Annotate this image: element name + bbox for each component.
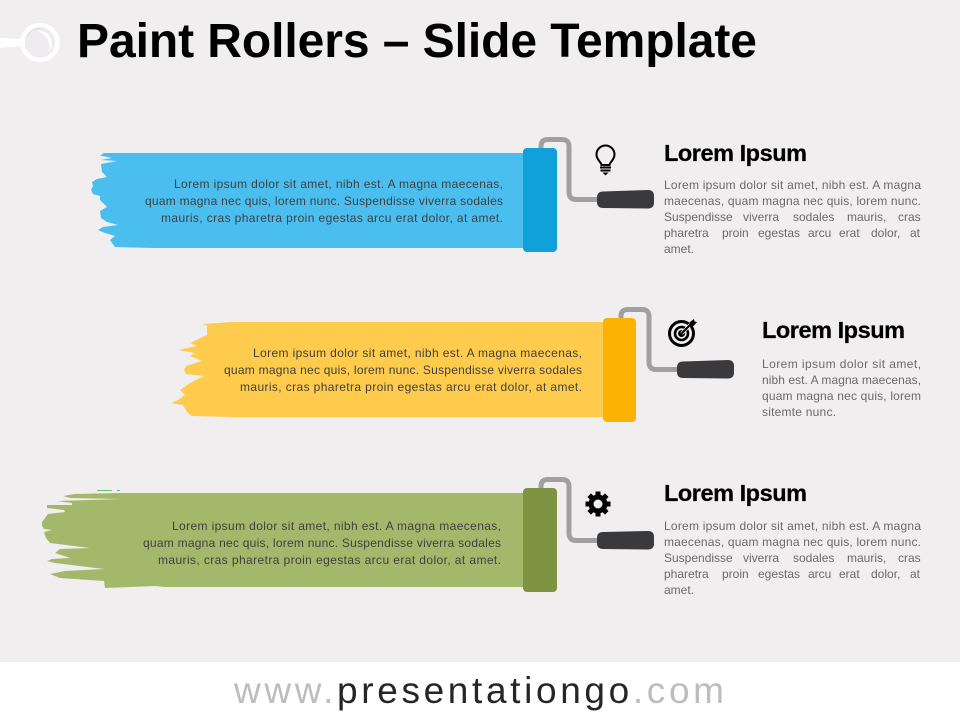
yellow stroke text: quam magna nec quis, lorem nunc. Suspendisse viverra sodales [224, 363, 582, 377]
green paint flecks [97, 490, 120, 492]
icon: target [670, 319, 697, 346]
body text: third item: viverra [743, 551, 779, 565]
yellow paint stroke [171, 322, 610, 417]
body text: third item: maecenas, quam magna nec quis, lorem nunc. [664, 535, 921, 549]
body text: third item: Lorem ipsum dolor sit amet, nibh est. A magna [664, 519, 921, 533]
panel: green paint roller [42, 480, 921, 597]
body text: third item: amet. [664, 583, 694, 597]
body text: first item: amet. [664, 242, 694, 256]
blue stroke text: quam magna nec quis, lorem nunc. Suspendisse viverra sodales [145, 194, 503, 208]
panel: yellow paint roller [171, 310, 921, 422]
yellow roller handle [621, 310, 734, 378]
footer website address: www.presentationgo.com [233, 670, 724, 711]
green stroke text: quam magna nec quis, lorem nunc. Suspendisse viverra sodales [143, 536, 501, 550]
heading: third item: Lorem Ipsum [664, 480, 807, 506]
body text: first item: egestas [758, 226, 800, 240]
body text: first item: mauris, [847, 210, 886, 224]
yellow stroke text: Lorem ipsum dolor sit amet, nibh est. A magna maecenas, [253, 346, 582, 360]
heading: first item: Lorem Ipsum [664, 140, 807, 166]
icon: title paint roller ring [0, 25, 58, 60]
body text: third item: Suspendisse [664, 551, 733, 565]
icon: light bulb [596, 146, 614, 176]
body text: third item: mauris, [847, 551, 886, 565]
body text: first item: dolor, [871, 226, 900, 240]
panel: blue paint roller [91, 140, 921, 256]
title: Paint Rollers – Slide Template [77, 15, 757, 68]
body text: third item: egestas [758, 567, 800, 581]
blue stroke text [145, 177, 503, 225]
green stroke text: Lorem ipsum dolor sit amet, nibh est. A magna maecenas, [172, 519, 501, 533]
green roller handle [541, 480, 654, 550]
icon: gear [586, 492, 610, 516]
body text: third item: sodales [793, 551, 834, 565]
green paint stroke [42, 493, 530, 588]
body text: third item: erat [839, 567, 860, 581]
body text: first item: sodales [793, 210, 834, 224]
body text: third item: dolor, [871, 567, 900, 581]
body text: first item: arcu [808, 226, 831, 240]
body text: third item [664, 519, 921, 597]
body text: third item: arcu [808, 567, 831, 581]
body text: third item: at [910, 567, 921, 581]
yellow stroke text: mauris, cras pharetra proin egestas arcu erat dolor, at amet. [240, 380, 582, 394]
body text: second item: nibh est. A magna maecenas, [762, 373, 921, 387]
body text: first item: maecenas, quam magna nec quis, lorem nunc. [664, 194, 921, 208]
body text: second item: Lorem ipsum dolor sit amet, [762, 357, 921, 371]
body text: first item [664, 178, 921, 256]
yellow stroke text [224, 346, 582, 394]
body text: third item: pharetra [664, 567, 709, 581]
blue stroke text: mauris, cras pharetra proin egestas arcu erat dolor, at amet. [161, 211, 503, 225]
yellow roller sleeve [603, 318, 636, 422]
body text: second item: quam magna nec quis, lorem [762, 389, 921, 403]
green roller sleeve [523, 488, 557, 592]
heading: second item: Lorem Ipsum [762, 317, 905, 343]
body text: first item: at [910, 226, 921, 240]
green stroke text [143, 519, 501, 567]
body text: second item [762, 357, 921, 419]
body text: first item: Suspendisse [664, 210, 733, 224]
body text: first item: cras [898, 210, 921, 224]
blue stroke text: Lorem ipsum dolor sit amet, nibh est. A magna maecenas, [174, 177, 503, 191]
green stroke text: mauris, cras pharetra proin egestas arcu erat dolor, at amet. [158, 553, 501, 567]
body text: first item: pharetra [664, 226, 709, 240]
blue roller handle [541, 140, 654, 208]
body text: second item: sitemte nunc. [762, 405, 836, 419]
body text: third item: proin [722, 567, 749, 581]
blue paint stroke [91, 153, 530, 248]
body text: first item: Lorem ipsum dolor sit amet, nibh est. A magna [664, 178, 921, 192]
body text: first item: erat [839, 226, 860, 240]
body text: first item: proin [722, 226, 749, 240]
body text: first item: viverra [743, 210, 779, 224]
body text: third item: cras [898, 551, 921, 565]
blue roller sleeve [523, 148, 557, 252]
